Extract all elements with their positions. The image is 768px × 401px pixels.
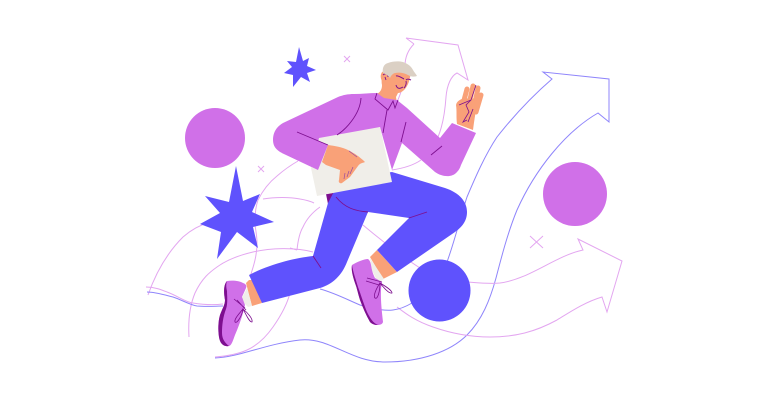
circle: purple left <box>185 108 245 168</box>
hand: on paper <box>322 145 365 183</box>
icon: small blue star <box>284 47 316 87</box>
socks and ankles <box>246 280 262 306</box>
arrow: left blue curves <box>147 289 412 310</box>
hand: raised <box>456 85 481 130</box>
sleeve cuff over paper <box>282 132 328 170</box>
neck and face <box>377 72 411 112</box>
circle: purple right <box>543 162 607 226</box>
arrow: upper purple arrow outline <box>392 38 468 170</box>
shoe: left <box>218 281 246 346</box>
arrow: left purple curves <box>146 161 320 357</box>
collar <box>297 93 442 155</box>
trousers shadow <box>326 191 345 204</box>
face details <box>396 76 411 88</box>
trouser lines <box>313 197 427 268</box>
icon: large blue star <box>200 166 274 259</box>
circle: blue bottom <box>408 260 470 322</box>
arrow: right purple arrow outline <box>363 225 622 337</box>
hair <box>383 61 417 78</box>
icon: cross marks <box>258 56 543 248</box>
figure: man <box>218 61 481 346</box>
ear <box>381 71 389 84</box>
shoe: right <box>352 259 383 325</box>
trousers <box>249 172 467 303</box>
paper <box>311 127 392 196</box>
arrow: large blue arrow outline <box>215 72 609 362</box>
shirt <box>273 93 476 176</box>
upper arrow line over head <box>377 61 417 112</box>
